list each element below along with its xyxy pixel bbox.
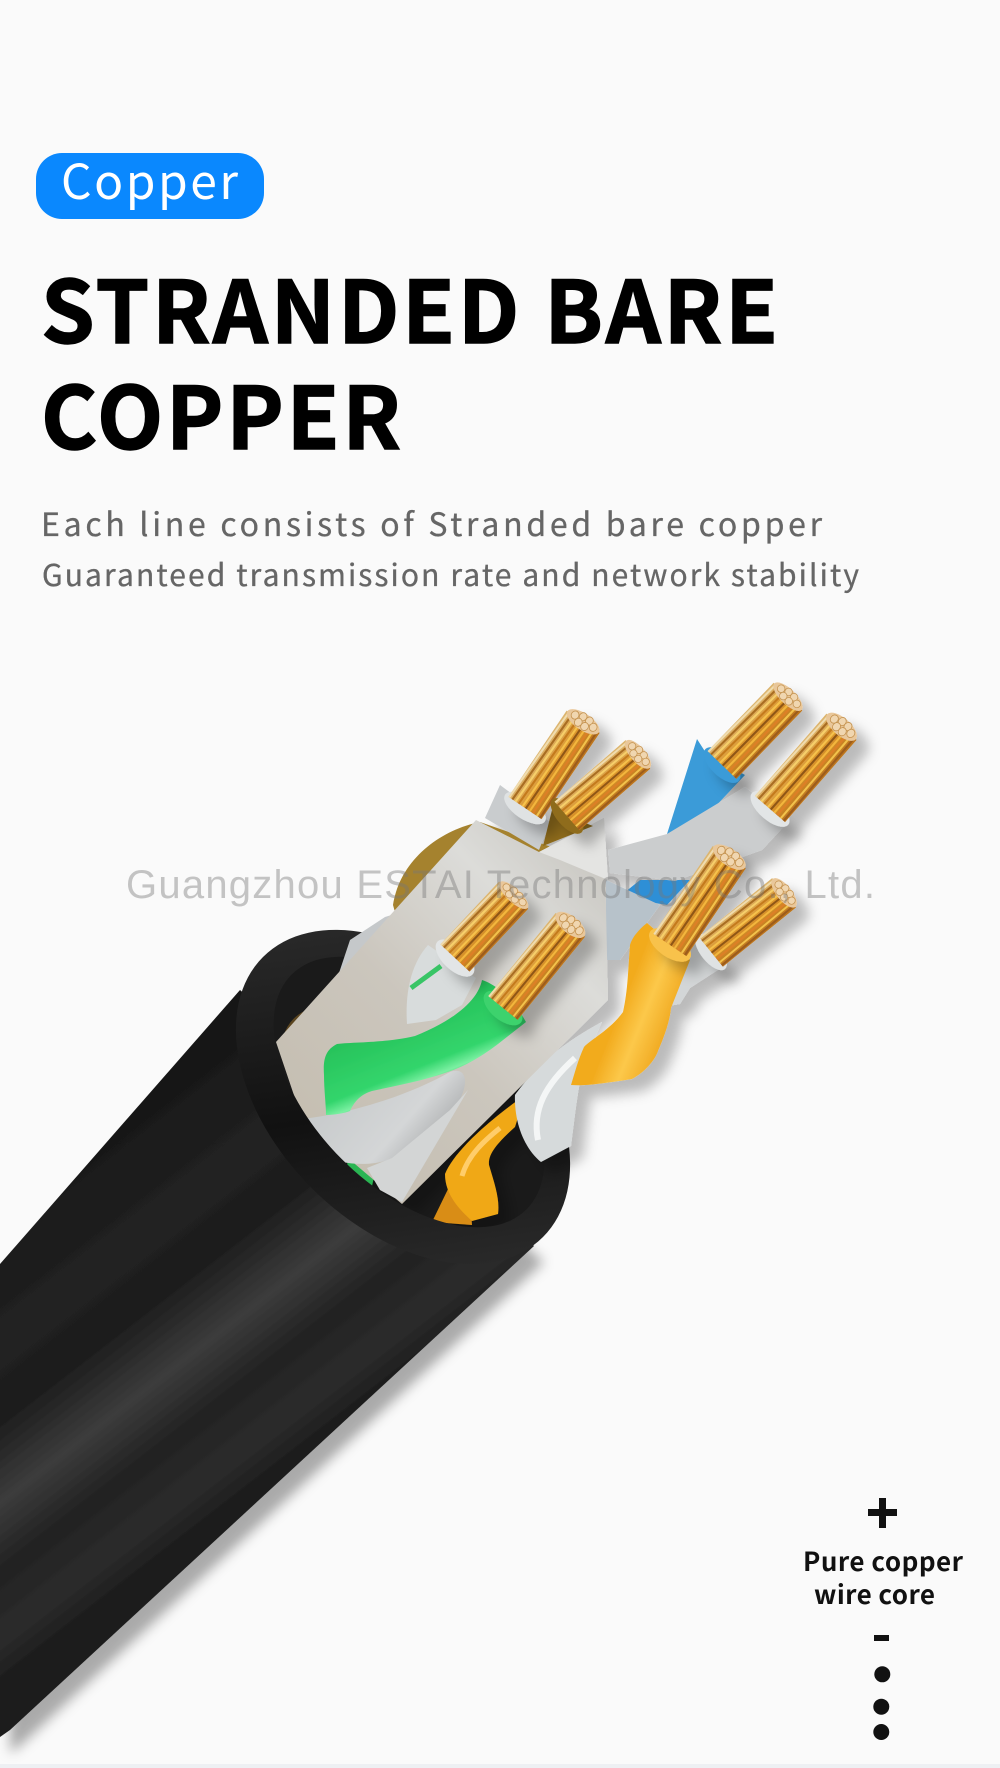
copper strand 3 [698, 675, 810, 789]
title [41, 243, 778, 474]
foil bright fold [539, 818, 608, 880]
yellow wire [571, 923, 690, 1085]
copper strand 4 [745, 704, 865, 833]
label: Pure copper wire core [803, 1542, 964, 1612]
cable end ring [172, 866, 634, 1328]
copper strand 7 [643, 837, 754, 968]
plus sign [868, 1498, 897, 1528]
description text: Each line consists of Stranded bare copper [41, 500, 823, 546]
blue wire [619, 739, 745, 905]
brown wire behind [393, 822, 550, 910]
tag: Copper: Copper [61, 143, 238, 213]
wire jackets at strands [485, 785, 727, 1006]
white wire lower [515, 1022, 602, 1162]
green wire [324, 980, 526, 1115]
label: Pure copper wire core: wire core [814, 1575, 935, 1612]
cable illustration [0, 675, 865, 1737]
copper strand 2 [545, 733, 658, 839]
orange wire [432, 1095, 525, 1225]
title: COPPER [41, 349, 401, 474]
grey wire rear left [339, 916, 390, 972]
description text: Guaranteed transmission rate and network stability [42, 551, 859, 595]
copper strands [429, 675, 865, 1032]
grey wire lower foreground [302, 1071, 465, 1164]
label: Pure copper wire core: Pure copper [803, 1542, 964, 1579]
copper strand 6 [478, 904, 594, 1032]
watermark: Guangzhou ESTAI Technology Co., Ltd. [126, 863, 875, 907]
minus sign [874, 1635, 889, 1641]
grey wire bottom [367, 1090, 468, 1202]
copper strand 8 [689, 871, 804, 975]
foil shield right piece [606, 880, 660, 960]
white wire with green stripe [407, 945, 476, 1024]
title: STRANDED BARE [41, 243, 778, 368]
copper strand 1 [499, 701, 608, 831]
foil shield [276, 818, 608, 1204]
small green segment [346, 1150, 380, 1190]
cable jacket body [0, 990, 534, 1737]
description text [41, 500, 859, 595]
grey wire rear right [608, 787, 788, 881]
cable hollow interior [224, 907, 594, 1277]
wire bundle [276, 739, 788, 1225]
copper strand 5 [429, 874, 536, 983]
three dots [873, 1666, 890, 1740]
